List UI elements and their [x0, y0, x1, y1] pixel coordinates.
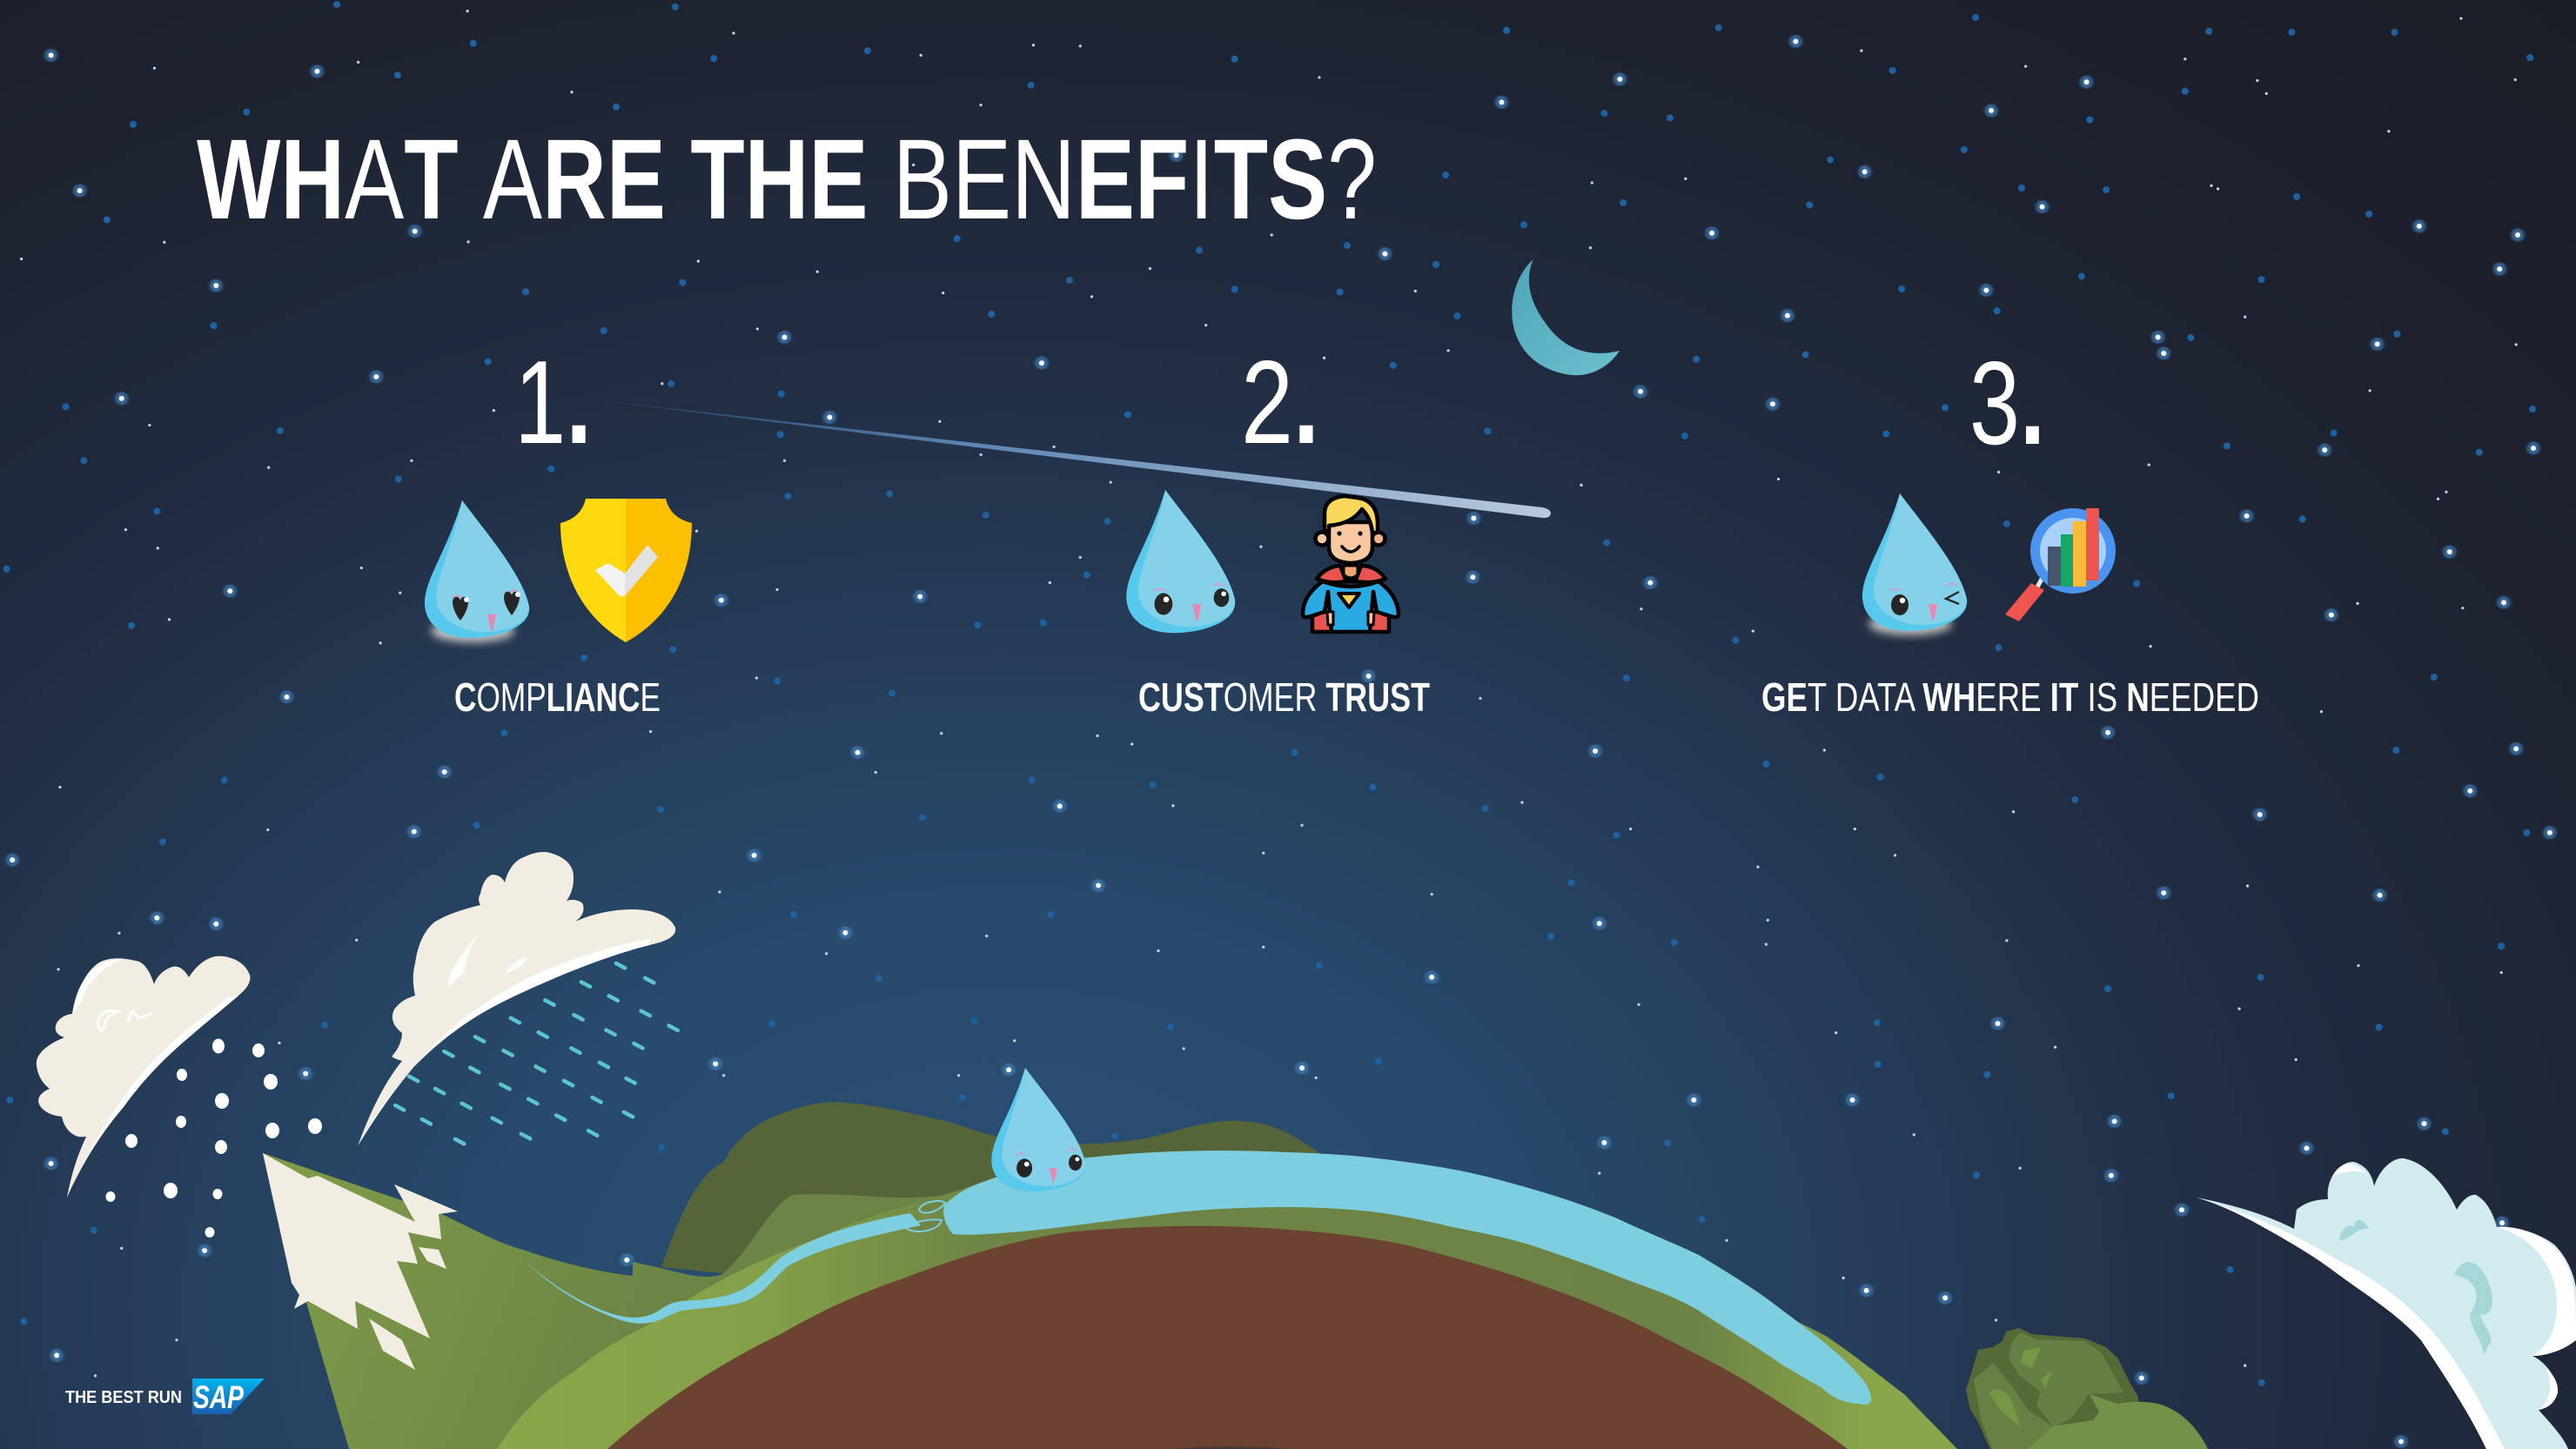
snowflakes	[106, 1039, 322, 1238]
number 1: 1.	[514, 336, 592, 468]
panel: benefit 3 get data	[1761, 337, 2259, 720]
cloud: pale blue cloud	[2197, 1158, 2576, 1449]
panel: benefit 2 customer trust	[1126, 336, 1430, 720]
planet: lake	[905, 1150, 1871, 1405]
rain drops	[395, 963, 678, 1144]
landscape: back hill	[661, 1102, 1332, 1297]
label: compliance: COMPLIANCE	[454, 674, 661, 720]
label: get data where it is needed: GET DATA WHERE IT IS NEEDED	[1761, 674, 2259, 720]
moon	[1512, 259, 1620, 375]
number 2: 2.	[1241, 336, 1319, 468]
title: WHAT ARE THE BENEFITS?	[197, 115, 1377, 243]
icon: smiling drop	[1126, 490, 1235, 633]
number 3: 3.	[1969, 337, 2045, 469]
icon: drop with heart eyes	[425, 500, 529, 642]
label: customer trust: CUSTOMER TRUST	[1138, 674, 1430, 720]
shooting star	[592, 399, 1551, 518]
cloud: rain cloud	[358, 852, 675, 1146]
planet: brown soil	[607, 1226, 1848, 1449]
icon: winking drop	[1862, 493, 1967, 635]
icon: magnifier with bar chart	[2005, 508, 2116, 621]
river	[526, 1213, 921, 1324]
central drop character	[991, 1068, 1085, 1191]
tree	[1966, 1328, 2208, 1449]
logo: the best run SAP: THE BEST RUN	[65, 1388, 182, 1407]
logo: the best run SAP	[65, 1379, 265, 1415]
icon: superhero	[1303, 496, 1399, 632]
icon: shield with check	[560, 499, 692, 642]
logo: the best run SAP: SAP	[193, 1379, 244, 1415]
panel: benefit 1 compliance	[425, 336, 692, 720]
cloud: snow cloud	[37, 956, 251, 1197]
planet: green surface	[497, 1157, 1957, 1449]
landscape: snowy mountain	[263, 1153, 986, 1449]
